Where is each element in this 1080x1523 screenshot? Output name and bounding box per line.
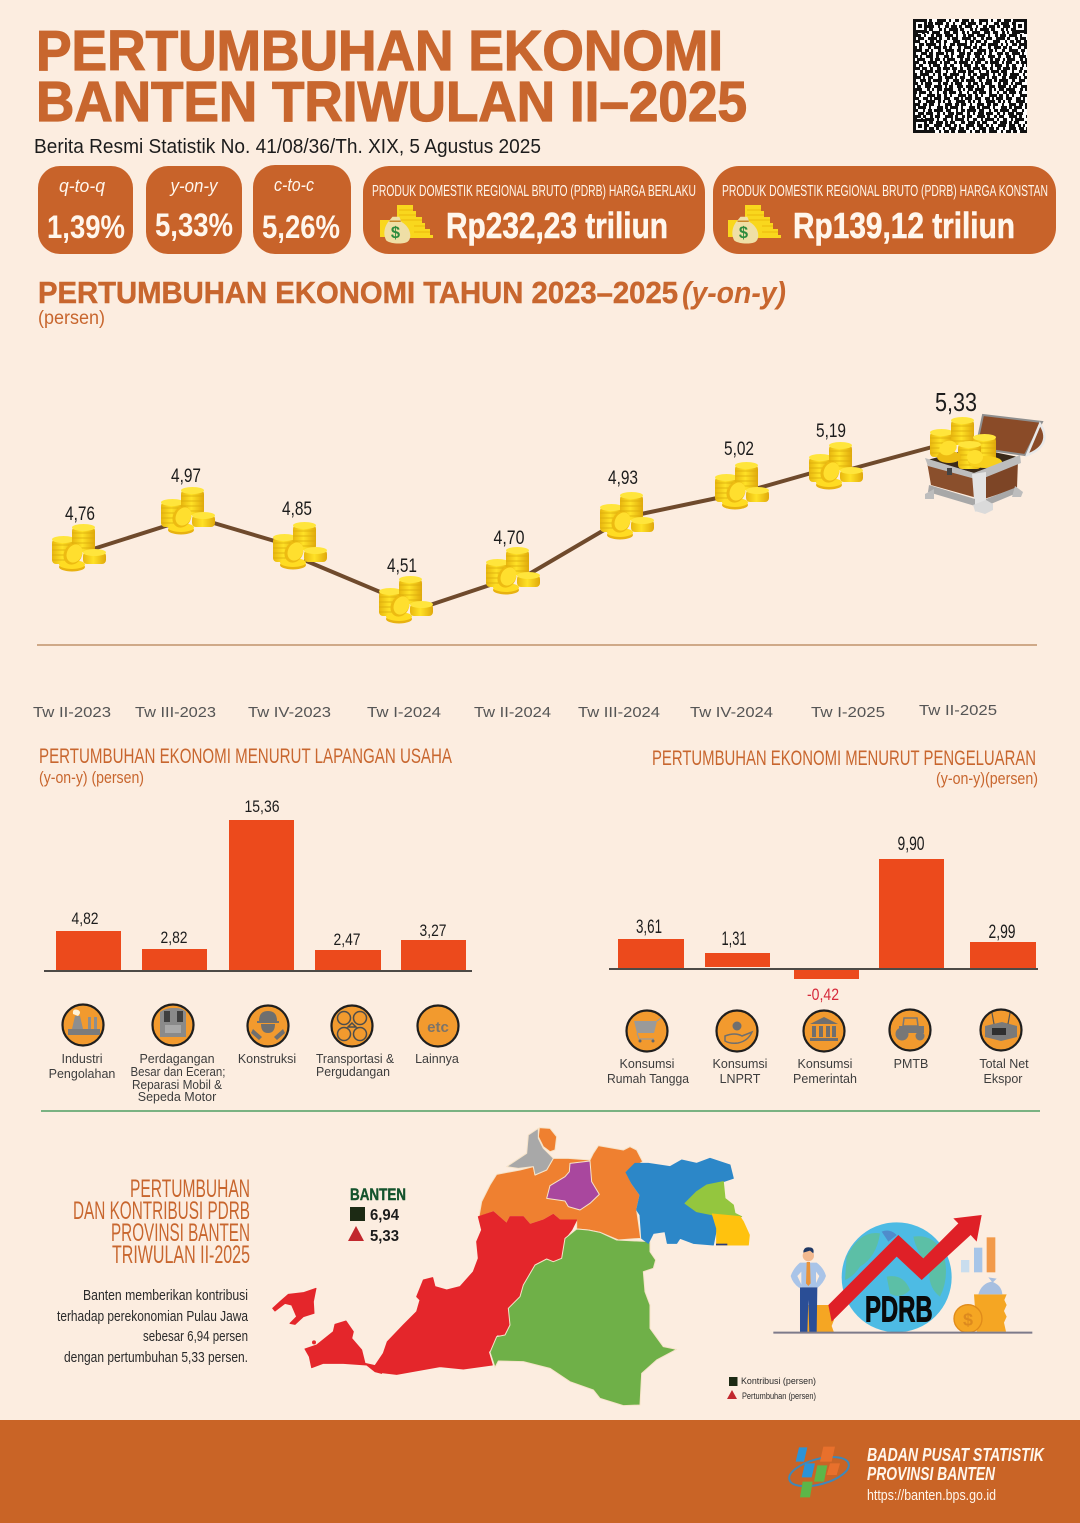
heading: lapangan usaha xyxy=(39,745,452,787)
bars xyxy=(961,1237,995,1272)
panel: y-on-y: 5,33% xyxy=(155,207,233,243)
value labels: 4,51 xyxy=(387,556,417,577)
heading: kontribusi: TRIWULAN II-2025 xyxy=(112,1241,250,1269)
category labels: pengeluaran: PMTB xyxy=(894,1057,928,1071)
value labels: 4,93 xyxy=(608,468,638,489)
category labels: lapangan usaha xyxy=(49,1052,459,1104)
category labels: lapangan usaha: Besar dan Eceran; xyxy=(130,1065,226,1079)
panel: q-to-q: 1,39% xyxy=(47,209,125,245)
category labels: lapangan usaha: Pergudangan xyxy=(316,1065,390,1079)
icon: government building xyxy=(810,1017,838,1041)
period labels: Tw III-2024 xyxy=(578,704,660,721)
category labels: pengeluaran: Total Net xyxy=(979,1057,1029,1071)
category labels: lapangan usaha: Perdagangan xyxy=(139,1052,215,1066)
coins Tw II-2024 xyxy=(486,547,540,594)
icon: etc: etc xyxy=(427,1019,449,1036)
bar chart: pengeluaran xyxy=(609,834,1038,1004)
value labels: 5,02 xyxy=(724,439,754,460)
map callout: Banten values: BANTEN xyxy=(350,1185,406,1204)
BPS logo xyxy=(786,1447,852,1497)
footer xyxy=(0,1420,1080,1523)
panel: c-to-c: 5,26% xyxy=(262,209,340,245)
icon: export containers xyxy=(985,1013,1017,1041)
coins left xyxy=(805,1305,834,1332)
title: PERTUMBUHAN EKONOMI xyxy=(36,19,723,83)
bar chart: pengeluaran: 3,61 xyxy=(636,917,662,938)
heading: line chart xyxy=(38,275,786,329)
description text: sebesar 6,94 persen xyxy=(143,1328,248,1345)
title: BANTEN TRIWULAN II–2025 xyxy=(36,70,747,134)
axis line xyxy=(37,644,1037,646)
icon: factory xyxy=(68,1010,100,1035)
heading: line chart: (y-on-y) xyxy=(682,275,786,310)
map callout: Banten values: 5,33 xyxy=(370,1228,399,1245)
category labels: pengeluaran: Konsumsi xyxy=(620,1057,674,1071)
ground line xyxy=(773,1330,1032,1336)
icon: shopping cart xyxy=(634,1018,661,1042)
icon: worker with wrenches xyxy=(251,1011,285,1040)
panel: q-to-q xyxy=(38,166,133,254)
icon: shop xyxy=(160,1008,186,1037)
category labels: pengeluaran: Rumah Tangga xyxy=(607,1072,689,1086)
period labels: Tw I-2025 xyxy=(811,704,885,721)
period labels xyxy=(33,702,997,721)
value labels: 5,19 xyxy=(816,421,846,442)
icon: tractor xyxy=(896,1018,924,1040)
category labels: lapangan usaha: Reparasi Mobil & xyxy=(132,1078,223,1092)
value labels: 4,76 xyxy=(65,504,95,525)
value labels: 4,97 xyxy=(171,466,201,487)
panel: PDRB harga konstan xyxy=(713,166,1056,254)
panel: PDRB harga berlaku xyxy=(363,166,705,254)
title xyxy=(36,19,747,134)
category labels: pengeluaran: Konsumsi xyxy=(713,1057,767,1071)
divider xyxy=(41,1110,1040,1112)
panel: c-to-c xyxy=(253,165,351,254)
panel: c-to-c: c-to-c xyxy=(274,175,314,195)
value labels: 4,70 xyxy=(494,528,524,549)
period labels: Tw II-2025 xyxy=(919,702,997,719)
bar chart: lapangan usaha xyxy=(44,797,472,971)
bar chart: lapangan usaha: 3,27 xyxy=(420,921,446,940)
icon: transport xyxy=(338,1012,366,1040)
coins Tw III-2023 xyxy=(161,487,215,534)
coins Tw I-2025 xyxy=(809,442,863,490)
icon: hand with coin xyxy=(725,1022,752,1043)
category labels: lapangan usaha: Transportasi & xyxy=(316,1052,395,1066)
map: Banten xyxy=(273,1128,749,1406)
value labels xyxy=(65,387,977,577)
money bag and coins xyxy=(954,1277,1007,1333)
bar chart: lapangan usaha: 15,36 xyxy=(244,797,280,816)
heading: kontribusi xyxy=(73,1175,250,1269)
category labels: lapangan usaha: Pengolahan xyxy=(49,1067,115,1081)
panel: PDRB harga berlaku: Rp232,23 triliun xyxy=(446,205,668,246)
icons: pengeluaran xyxy=(626,1010,1022,1052)
panel: q-to-q: q-to-q xyxy=(59,176,105,196)
footer: PROVINSI BANTEN xyxy=(867,1464,996,1484)
bar chart: lapangan usaha: 4,82 xyxy=(72,909,98,928)
map legend xyxy=(727,1376,816,1401)
icon: money bag and gold xyxy=(728,205,781,244)
value labels: 5,33 xyxy=(935,387,977,417)
bar chart: pengeluaran: 2,99 xyxy=(988,922,1016,943)
website: https://banten.bps.go.id xyxy=(867,1487,996,1504)
category labels: pengeluaran: Ekspor xyxy=(984,1072,1022,1086)
panel: y-on-y xyxy=(146,166,242,254)
category labels: pengeluaran: LNPRT xyxy=(720,1072,761,1086)
category labels: lapangan usaha: Konstruksi xyxy=(238,1052,296,1066)
map legend: Pertumbuhan (persen) xyxy=(742,1391,816,1401)
bar chart: pengeluaran: 1,31 xyxy=(722,929,746,950)
icon: money bag and gold xyxy=(380,205,433,244)
money bag and coins: $ xyxy=(963,1309,973,1329)
coins Tw I-2024 xyxy=(379,576,433,624)
heading: kontribusi: PERTUMBUHAN xyxy=(130,1175,250,1203)
period labels: Tw I-2024 xyxy=(367,704,441,721)
description text: terhadap perekonomian Pulau Jawa xyxy=(57,1308,249,1325)
category labels: pengeluaran xyxy=(607,1057,1029,1086)
heading: line chart: PERTUMBUHAN EKONOMI TAHUN 2023–2025 xyxy=(38,275,678,310)
map callout: Banten values xyxy=(348,1185,406,1245)
bar chart: pengeluaran: 9,90 xyxy=(898,834,924,855)
icons: lapangan usaha xyxy=(62,1004,458,1046)
coins Tw II-2023 xyxy=(52,524,106,572)
coins Tw III-2024 xyxy=(600,492,654,540)
heading: kontribusi: PROVINSI BANTEN xyxy=(111,1219,250,1247)
category labels: pengeluaran: Konsumsi xyxy=(798,1057,852,1071)
period labels: Tw III-2023 xyxy=(135,704,216,721)
description text xyxy=(57,1287,249,1366)
arrow xyxy=(828,1215,982,1322)
person xyxy=(791,1247,826,1333)
period labels: Tw IV-2023 xyxy=(248,704,331,721)
panel: PDRB harga berlaku: PRODUK DOMESTIK REGIONAL BRUTO (PDRB) HARGA BERLAKU xyxy=(372,183,696,200)
coins Tw IV-2023 xyxy=(273,522,327,570)
period labels: Tw II-2023 xyxy=(33,704,111,721)
panel: y-on-y: y-on-y xyxy=(169,176,218,196)
heading: lapangan usaha: PERTUMBUHAN EKONOMI MENURUT LAPANGAN USAHA xyxy=(39,745,452,768)
PDRB label: PDRB xyxy=(865,1289,933,1330)
heading: lapangan usaha: (y-on-y) (persen) xyxy=(39,768,144,787)
heading: pengeluaran xyxy=(652,747,1038,788)
illustration: PDRB growth xyxy=(773,1215,1032,1333)
map legend: Kontribusi (persen) xyxy=(741,1376,816,1386)
period labels: Tw IV-2024 xyxy=(690,704,773,721)
line chart xyxy=(33,387,1044,721)
heading: kontribusi: DAN KONTRIBUSI PDRB xyxy=(73,1197,250,1225)
bar chart: lapangan usaha: 2,47 xyxy=(334,930,360,949)
category labels: lapangan usaha: Lainnya xyxy=(415,1052,459,1066)
category labels: lapangan usaha: Industri xyxy=(62,1052,102,1066)
heading: pengeluaran: (y-on-y)(persen) xyxy=(936,769,1038,788)
bar chart: pengeluaran: -0,42 xyxy=(807,985,839,1004)
category labels: lapangan usaha: Sepeda Motor xyxy=(138,1090,216,1104)
subtitle: Berita Resmi Statistik No. 41/08/36/Th. XIX, 5 Agustus 2025 xyxy=(34,136,541,158)
description text: Banten memberikan kontribusi xyxy=(83,1287,248,1304)
QR code xyxy=(913,19,1027,133)
panel: PDRB harga konstan: Rp139,12 triliun xyxy=(793,205,1015,246)
globe xyxy=(842,1222,952,1332)
icon: treasure chest xyxy=(925,415,1044,514)
heading: line chart: (persen) xyxy=(38,308,105,329)
period labels: Tw II-2024 xyxy=(474,704,551,721)
coins Tw IV-2024 xyxy=(715,462,769,510)
description text: dengan pertumbuhan 5,33 persen. xyxy=(64,1349,248,1366)
bar chart: lapangan usaha: 2,82 xyxy=(160,928,188,947)
value labels: 4,85 xyxy=(282,499,312,520)
map callout: Banten values: 6,94 xyxy=(370,1207,399,1224)
category labels: pengeluaran: Pemerintah xyxy=(793,1072,857,1086)
